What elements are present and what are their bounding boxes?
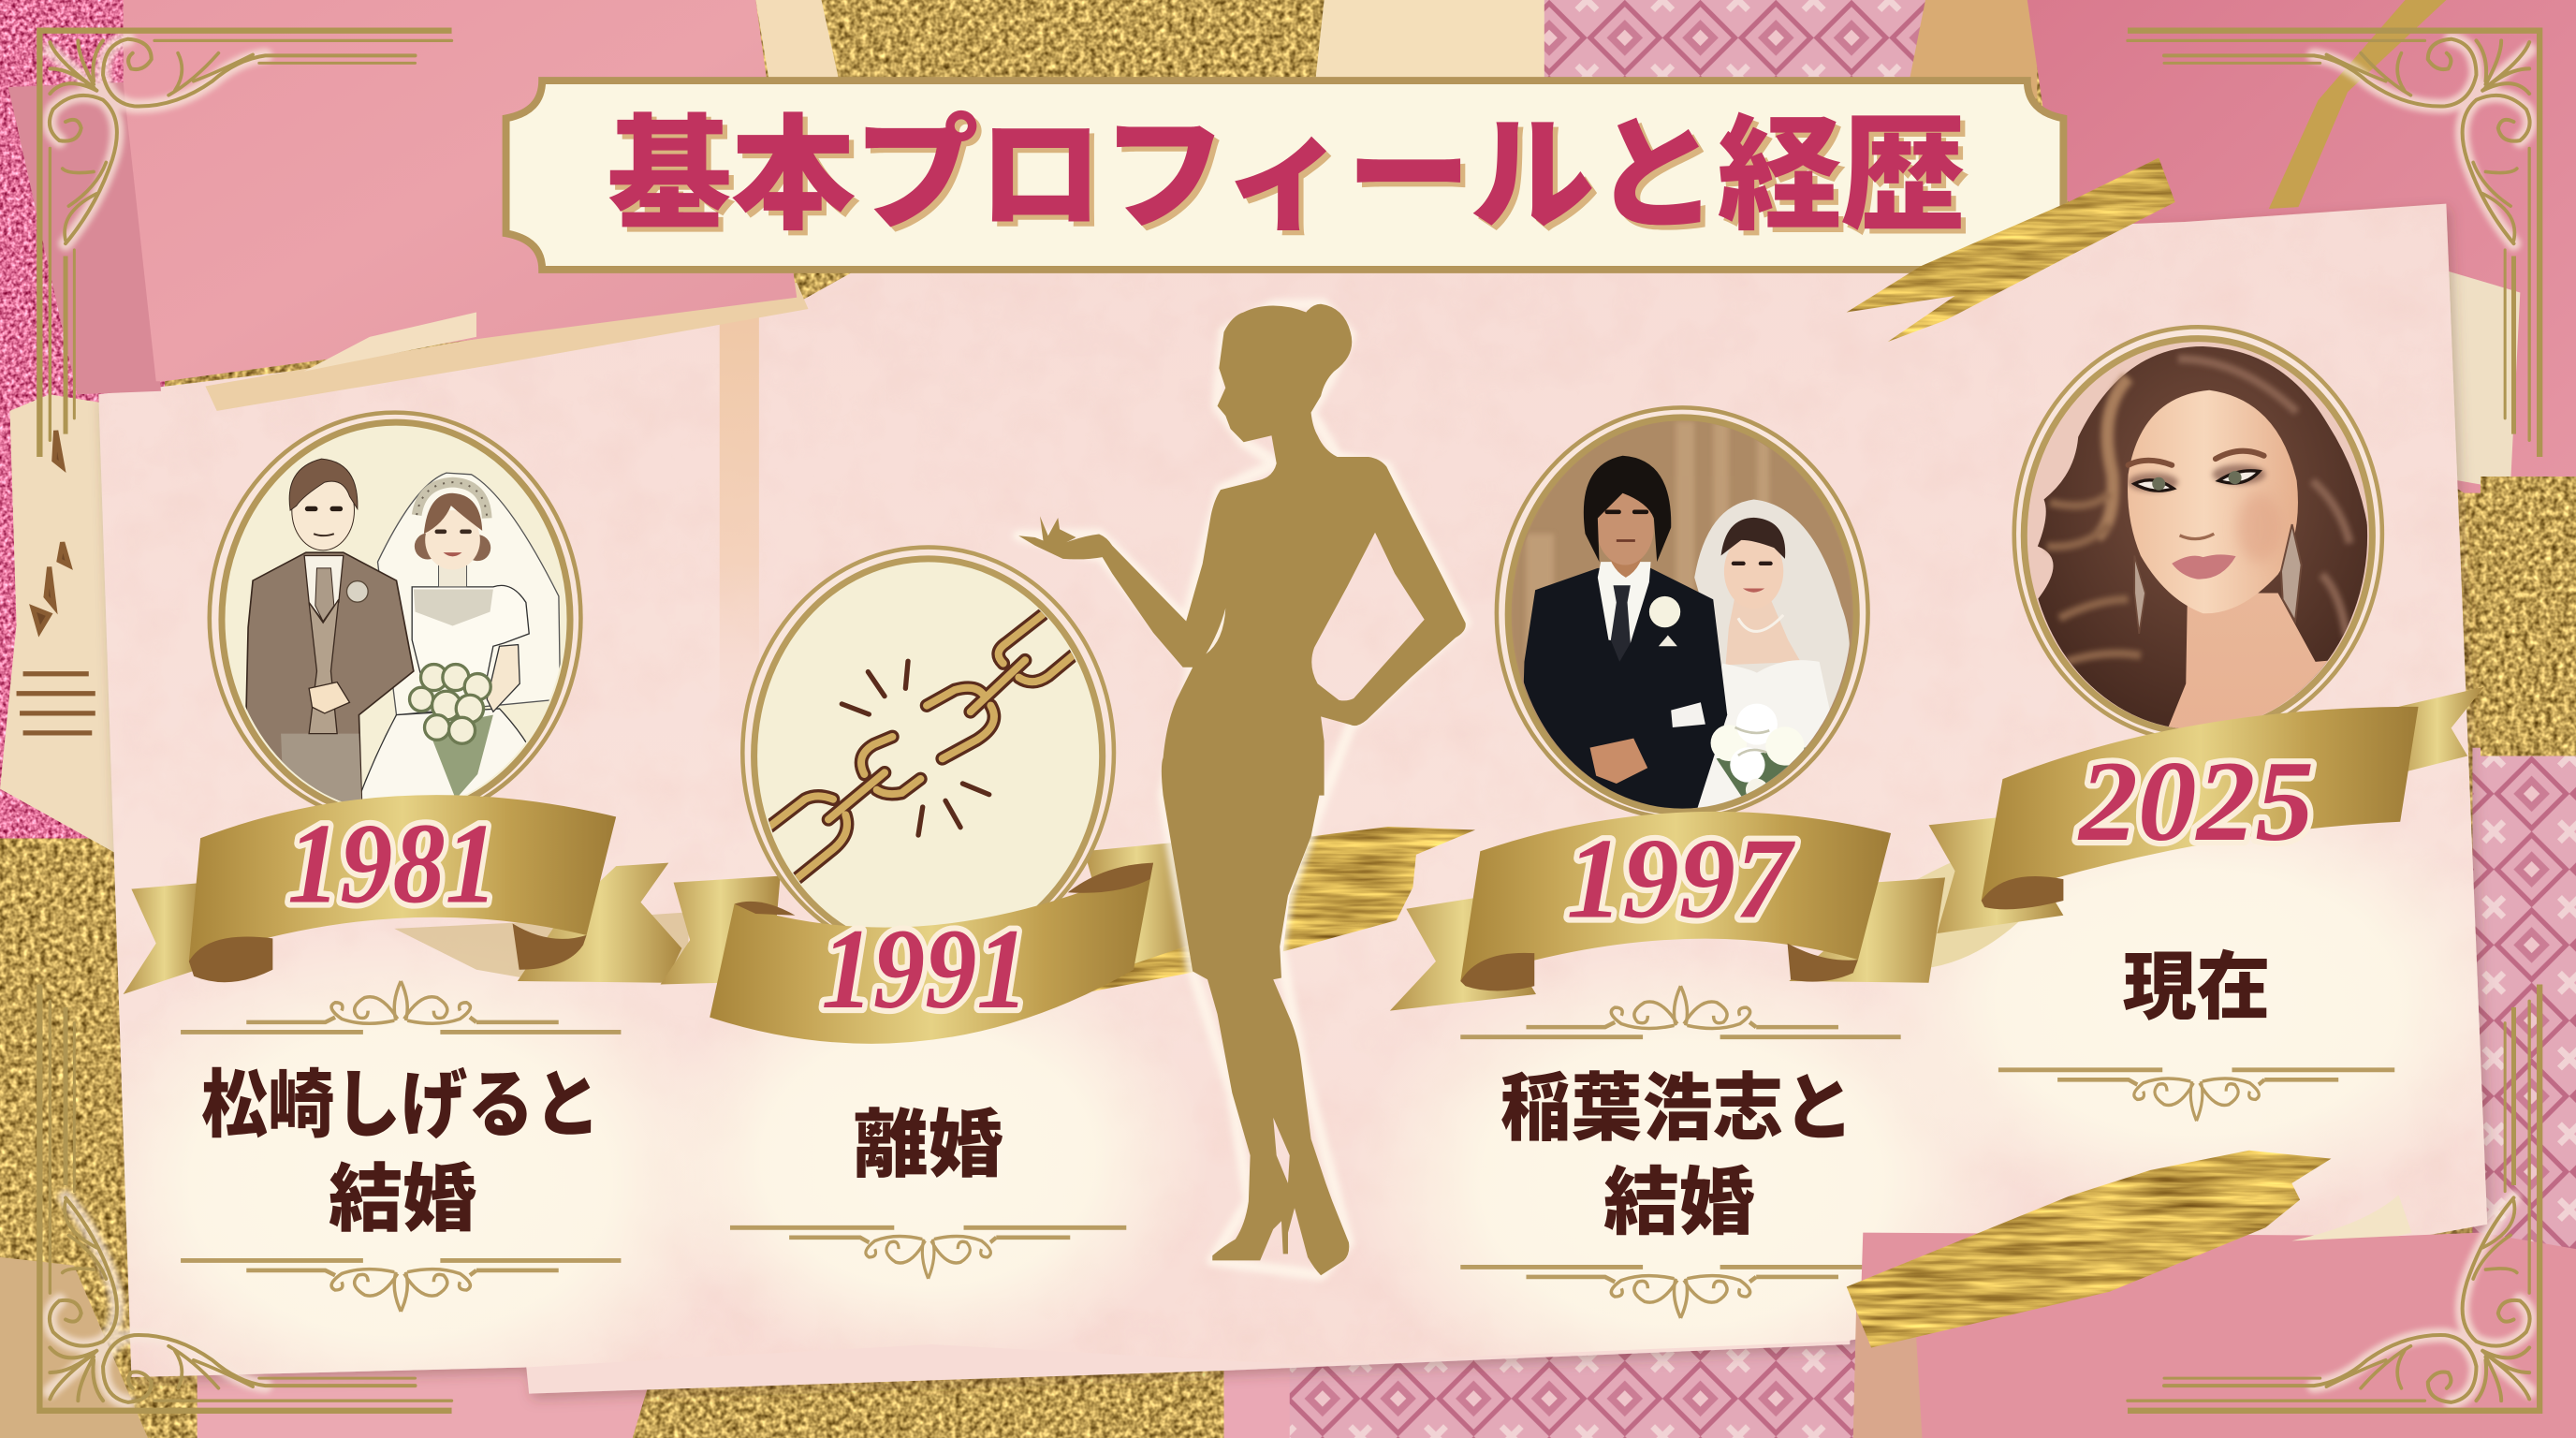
pale wash under 1981 ribbon: [394, 912, 690, 981]
corner ornament bottom left: [39, 985, 452, 1411]
caption 1991: 離婚: [854, 1104, 1003, 1186]
brows: [2129, 451, 2264, 465]
boutonniere: [346, 581, 368, 602]
brown spots on torn paper: [17, 431, 95, 733]
broken chain icon: [765, 615, 1076, 882]
portrait oval 2025: present-day woman: [2014, 327, 2382, 756]
groom head: [292, 470, 354, 550]
patterned pink panel top: [1544, 0, 1939, 91]
divider below 1991 caption: [730, 1227, 1126, 1279]
bride neck and chest: [1726, 596, 1801, 665]
left curl: [735, 902, 795, 916]
right curl: [1788, 944, 1858, 982]
left curl: [1460, 953, 1534, 991]
earrings: [2281, 524, 2302, 622]
left curl: [1982, 876, 2063, 909]
oval frame: [1497, 407, 1868, 818]
tan edge of paper: [1853, 1299, 1922, 1438]
bride fringe: [424, 493, 482, 534]
torn cream strip right: [2448, 271, 2520, 490]
nose: [2180, 534, 2214, 539]
tan edge under pink paper: [205, 283, 809, 411]
ribbon band: [1460, 812, 1891, 981]
right curl: [1068, 863, 1153, 893]
caption 1981: 松崎しげると: [201, 1064, 600, 1147]
ribbon tails 1997: [1390, 877, 1945, 1011]
divider below 1981 caption: [181, 1260, 621, 1312]
year 1981: 1981: [287, 800, 498, 928]
divider below 1997 caption: [1460, 1267, 1901, 1318]
groom tie: [315, 568, 334, 622]
ribbon tails 1981: [124, 863, 681, 994]
bride skirt: [361, 708, 526, 800]
pink paper top right: [2027, 0, 2576, 493]
bride bodice and sleeves: [412, 585, 529, 678]
divider above 1981 caption: [181, 981, 621, 1032]
couple photo: [1507, 421, 1866, 840]
corner ornament top right: [2128, 31, 2539, 457]
ribbon 1997: [1460, 812, 1891, 991]
groom hand: [1589, 739, 1647, 784]
sparkling dress strap: [2272, 659, 2349, 740]
pink paper bottom right: [1853, 1195, 2576, 1438]
groom neck and face: [1605, 540, 1647, 578]
groom features: [307, 501, 340, 516]
ribbon band: [710, 863, 1153, 1044]
bouquet: [1711, 704, 1816, 814]
ribbon 2025: [1982, 707, 2419, 909]
bride glove: [1671, 702, 1705, 727]
groom hair: [1584, 456, 1671, 562]
ribbon band: [189, 795, 616, 961]
lace yoke: [414, 590, 493, 626]
tiara: [417, 482, 487, 518]
bride features: [437, 525, 470, 538]
pink paper bottom left: [198, 1356, 657, 1438]
gold brush stroke bottom right: [1847, 1151, 2331, 1347]
darker textured underlay: [8, 82, 161, 394]
bride arm: [487, 645, 520, 712]
ribbon tails 2025: [1928, 687, 2484, 933]
pink sheet: [124, 0, 797, 381]
torn cream corner: [304, 313, 476, 372]
spark lines: [842, 661, 989, 835]
lips: [2172, 554, 2236, 580]
groom vest: [309, 599, 339, 734]
groom tie: [1611, 585, 1631, 662]
ribbon 1981: [189, 795, 616, 982]
gold brush glitter mid right: [1283, 827, 1475, 951]
ribbon band: [1982, 707, 2419, 901]
caption 1997: [1500, 1067, 1854, 1243]
bride face: [1724, 534, 1783, 609]
groom trousers: [281, 734, 362, 814]
waist highlight: [1206, 609, 1225, 654]
vertical fold strip: [719, 317, 759, 661]
groom hand: [309, 682, 349, 713]
patterned pink panel bottom: [1281, 1323, 1873, 1438]
corner ornament bottom right: [2128, 985, 2539, 1411]
plate shape: [506, 81, 2063, 270]
hair mass: [2038, 346, 2372, 756]
bride features: [1734, 557, 1771, 569]
cream paper scrap top: [1314, 0, 1560, 91]
boutonniere: [1649, 596, 1680, 627]
portrait oval 1981: wedding illustration: [210, 413, 580, 823]
caption 1981: 結婚: [329, 1158, 476, 1240]
groom suit: [1523, 568, 1727, 828]
gold streak top right: [2269, 0, 2446, 209]
year 1997: 1997: [1566, 815, 1795, 943]
main paper sheet: [98, 204, 2487, 1394]
divider below 2025 caption: [1998, 1070, 2394, 1121]
paper texture and glows: [122, 317, 2481, 1374]
gold brush stroke top right: [1847, 158, 2175, 342]
veil: [1694, 499, 1850, 727]
tan scrap bottom left: [0, 1257, 148, 1438]
silhouette glow: [1018, 304, 1466, 1275]
portrait oval 1991: broken chain: [742, 548, 1114, 958]
cheek shading: [2237, 493, 2281, 562]
oval frame: [210, 413, 580, 823]
portrait oval 1997: wedding photo: [1497, 407, 1868, 840]
face: [2128, 390, 2298, 613]
neck and chest: [2159, 594, 2349, 749]
curtain background: [1507, 421, 1866, 840]
upper paper sheet: [98, 204, 2487, 1377]
eye shadow: [2129, 464, 2265, 492]
groom shirt: [1598, 562, 1651, 643]
portrait: [2038, 346, 2372, 756]
curled paper scrap: [2291, 1195, 2411, 1240]
bride hair: [1721, 518, 1785, 559]
right gold glitter patch: [2481, 477, 2576, 756]
bouquet: [410, 665, 493, 800]
oval frame: [2014, 327, 2382, 741]
divider above 1997 caption: [1460, 986, 1901, 1037]
corner ornament top left: [39, 31, 452, 457]
gold brush glitter mid left: [1051, 924, 1208, 992]
bride face: [425, 510, 480, 570]
chain gold fill: [765, 615, 1076, 882]
tan paper scrap top: [1906, 0, 2037, 98]
torn cream paper left: [0, 394, 118, 855]
oval frame: [742, 548, 1114, 958]
necklace: [1738, 615, 1783, 631]
left curl: [189, 937, 272, 982]
pale ribbon swirl between 1997 and 2025: [1889, 838, 2029, 970]
title shadow: 基本プロフィールと経歴: [612, 111, 1970, 251]
pink glitter left strip: [0, 0, 165, 838]
cream torn strip under pink paper: [755, 0, 842, 98]
cream glows behind captions: [122, 830, 2481, 1374]
bride neck: [439, 565, 467, 587]
veil: [377, 473, 561, 715]
caption 1997: 稲葉浩志と: [1500, 1067, 1854, 1150]
pink stripe bottom centre: [1224, 1356, 1290, 1438]
groom hair: [289, 459, 358, 510]
ribbon 1991: [710, 863, 1153, 1044]
groom features: [1607, 506, 1647, 519]
silhouette of woman: [1018, 304, 1466, 1275]
eyes: [2134, 471, 2260, 491]
hair highlights: [2047, 359, 2349, 662]
right curl: [513, 924, 587, 970]
ribbon tails 1991: [661, 842, 1190, 985]
pink paper top left: [8, 0, 809, 411]
caption 1981: [201, 1064, 600, 1240]
caption 1997: 結婚: [1603, 1161, 1754, 1243]
lower paper sheet: [526, 1314, 1850, 1394]
year 1991: 1991: [822, 905, 1029, 1033]
bride dress: [1691, 660, 1835, 821]
caption 2025: 現在: [2123, 946, 2271, 1028]
patterned pink panel right: [2472, 748, 2576, 1438]
title text: 基本プロフィールと経歴: [607, 106, 1966, 245]
groom shirt: [304, 556, 344, 622]
bride hair buns: [415, 533, 441, 560]
chain outline: [765, 615, 1076, 882]
title plate: [506, 81, 2063, 270]
year 2025: 2025: [2077, 738, 2314, 865]
couple illustration: [245, 459, 561, 814]
groom suit: [245, 552, 414, 814]
